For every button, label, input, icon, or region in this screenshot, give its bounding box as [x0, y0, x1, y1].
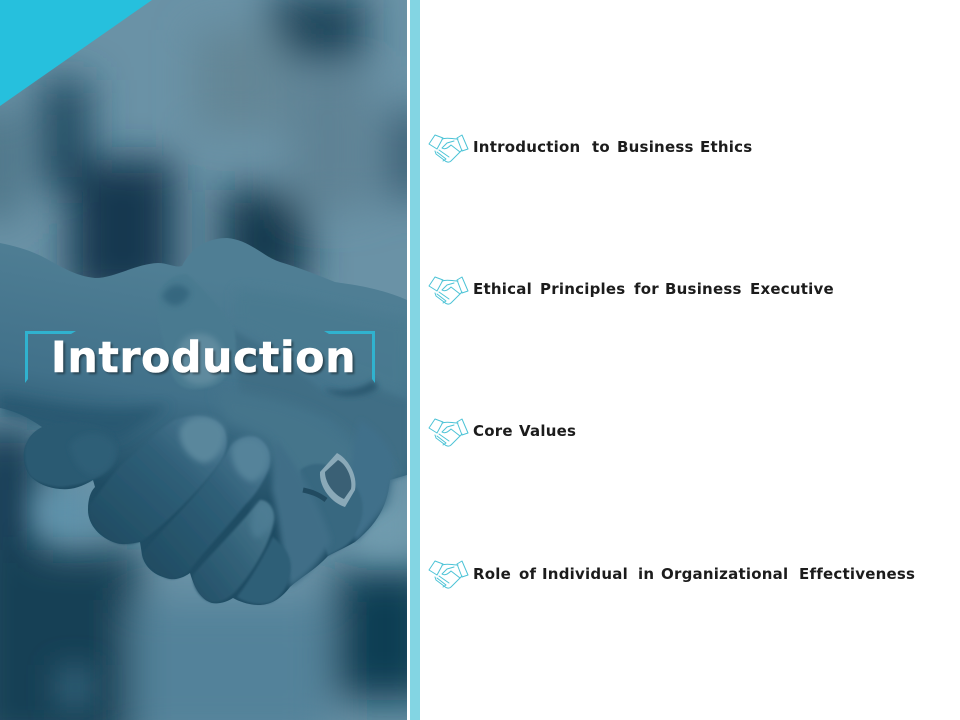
list item 4: Role	[473, 565, 511, 583]
list item 4: Effectiveness	[799, 565, 915, 583]
ring finger	[300, 464, 363, 556]
list item 4: Organizational	[661, 565, 788, 583]
left bracket	[25, 331, 76, 383]
third finger	[193, 500, 274, 602]
middle finger back	[272, 440, 331, 587]
panel: handshake photo with blue tint	[0, 0, 407, 720]
title with bracket frame	[25, 331, 375, 383]
icon: handshake 3	[428, 418, 468, 447]
list item 3: Core	[473, 422, 513, 440]
list item 2: for	[634, 280, 659, 298]
list item 2: Ethical	[473, 280, 532, 298]
icon: handshake 2	[428, 276, 468, 305]
list item 2: Business	[665, 280, 742, 298]
list item 1	[473, 138, 752, 156]
list item 1: Business	[617, 138, 694, 156]
list item 3: Values	[519, 422, 576, 440]
right hand back shading	[233, 330, 407, 480]
upper thumb	[158, 274, 236, 389]
list item 1: Introduction	[473, 138, 580, 156]
list item 4: of	[519, 565, 536, 583]
fourth finger	[237, 537, 291, 604]
list item 1: Ethics	[700, 138, 752, 156]
list item 4: Individual	[542, 565, 628, 583]
vertical light-blue bar	[410, 0, 420, 720]
icon: handshake 4	[428, 560, 468, 589]
icon: handshake 1	[428, 134, 468, 163]
lower left thumb	[25, 423, 118, 487]
list item 1: to	[592, 138, 610, 156]
list item 2: Principles	[540, 280, 625, 298]
list item 2: Executive	[750, 280, 834, 298]
title: Introduction	[51, 334, 356, 383]
photo background blur	[0, 0, 435, 720]
cyan corner triangle	[0, 0, 152, 106]
little finger	[348, 420, 393, 542]
second finger	[143, 436, 270, 579]
handshake hands	[0, 238, 407, 605]
list item 4: in	[638, 565, 654, 583]
list item 3	[473, 422, 576, 440]
list item 2	[473, 280, 834, 298]
list item 4	[473, 565, 915, 583]
overall silhouette	[0, 238, 407, 605]
first finger	[90, 416, 227, 544]
right bracket	[324, 331, 375, 383]
ring	[303, 453, 356, 507]
